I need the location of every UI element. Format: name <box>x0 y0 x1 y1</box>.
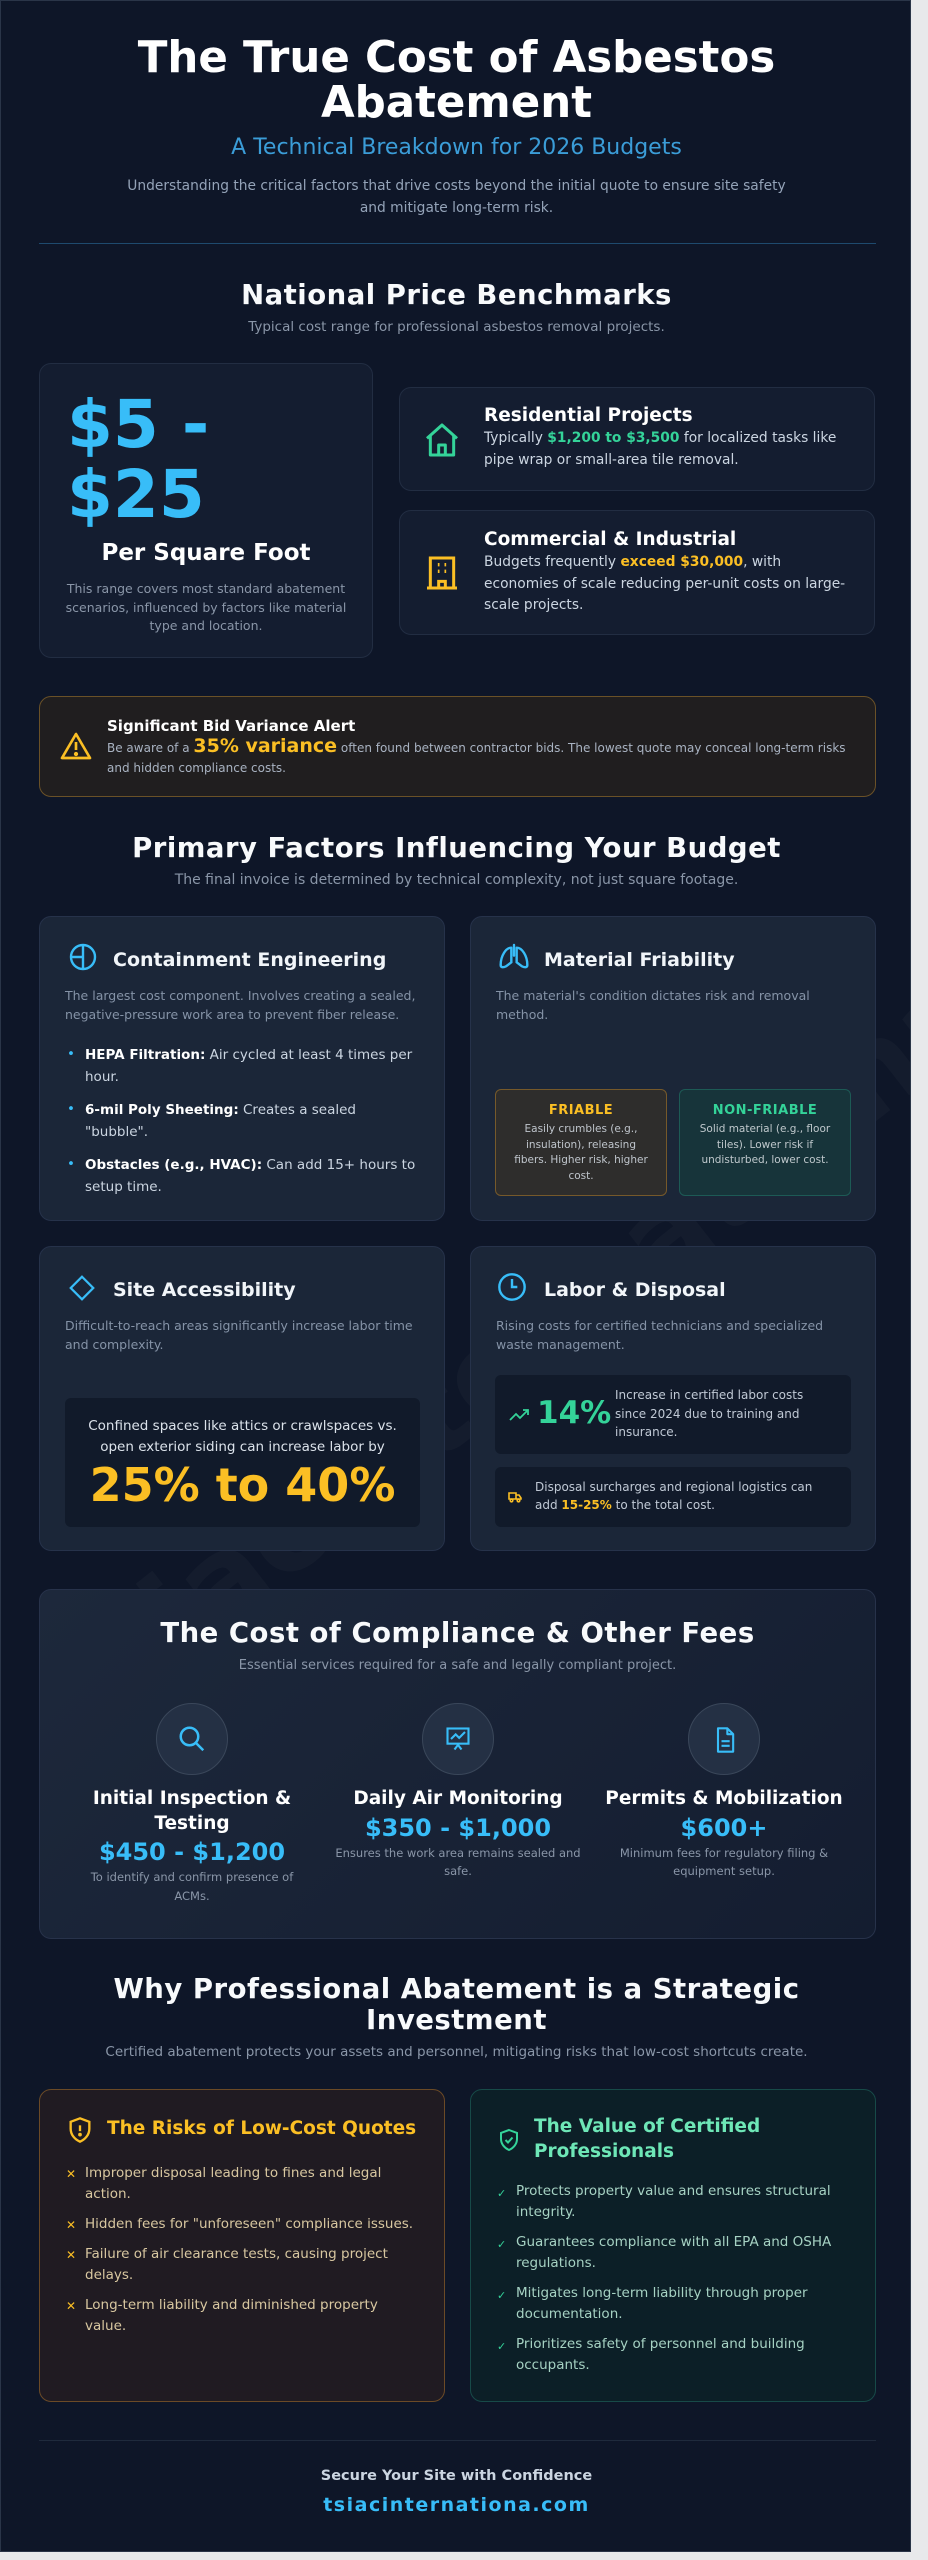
item: inspection: $450 - $1,200 <box>99 1838 285 1866</box>
item: air monitoring: Ensures the work area remains sealed and safe. <box>335 1846 581 1878</box>
title: The True Cost of Asbestos <box>138 33 775 83</box>
icon: diamond <box>69 1275 95 1301</box>
stat box: 14%: 14% <box>537 1395 611 1431</box>
bullet list: HEPA Filtration: Air cycled at least 4 times per hour. <box>85 1047 412 1084</box>
icon: shield check <box>500 2128 518 2152</box>
subheading: Essential services required for a safe and legally compliant project. <box>239 1658 676 1673</box>
icon: shield alert <box>70 2117 90 2143</box>
title: Material Friability <box>544 949 735 971</box>
stat box: disposal: Disposal surcharges and regional logistics can add 15-25% to the total cost. <box>535 1480 812 1512</box>
bullet list: • <box>67 1046 75 1062</box>
body: Typically $1,200 to $3,500 for localized tasks like pipe wrap or small-area tile removal. <box>484 430 836 468</box>
list: Hidden fees for "unforeseen" compliance issues. <box>85 2216 413 2232</box>
alert title: Significant Bid Variance Alert <box>107 717 355 735</box>
title: Labor & Disposal <box>544 1279 726 1301</box>
panel: labor & disposal <box>470 1246 876 1551</box>
icon: trend <box>509 1409 529 1421</box>
stat box: 14% <box>495 1375 851 1454</box>
title: The Value of Certified Professionals <box>534 2116 760 2162</box>
list: ✕ <box>66 2248 76 2262</box>
item: permits: Minimum fees for regulatory filing & equipment setup. <box>620 1846 828 1878</box>
list: ✕ <box>66 2167 76 2181</box>
item: permits <box>605 1703 843 1878</box>
list: ✓ <box>497 2187 506 2200</box>
bullet list: Obstacles (e.g., HVAC): Can add 15+ hours to setup time. <box>85 1157 415 1194</box>
subheading: Typical cost range for professional asbestos removal projects. <box>248 319 665 335</box>
icon: warning <box>60 732 92 760</box>
intro text: Understanding the critical factors that drive costs beyond the initial quote to ensure site safety and mitigate long-term risk. <box>127 178 786 216</box>
highlight box: Confined spaces like attics or crawlspaces vs. open exterior siding can increase labor by <box>88 1418 397 1455</box>
list <box>497 2183 832 2373</box>
icon: house <box>426 423 458 456</box>
body: Budgets frequently exceed $30,000, with economies of scale reducing per-unit costs on large-scale projects. <box>484 554 845 613</box>
item: inspection: Initial Inspection & Testing <box>93 1788 291 1834</box>
title: Residential Projects <box>484 405 693 426</box>
footer tagline: Secure Your Site with Confidence <box>321 2468 592 2484</box>
bullet list: "bubble". <box>85 1124 148 1140</box>
list: Failure of air clearance tests, causing project delays. <box>85 2246 388 2283</box>
icon: containment <box>70 944 96 970</box>
item: air monitoring <box>335 1703 581 1878</box>
description: Rising costs for certified technicians and specialized waste management. <box>496 1318 823 1352</box>
callout: bid variance alert <box>39 696 876 797</box>
subtitle: A Technical Breakdown for 2026 Budgets <box>231 135 682 160</box>
list: Prioritizes safety of personnel and building occupants. <box>516 2336 805 2373</box>
subheading: The final invoice is determined by technical complexity, not just square footage. <box>175 872 738 888</box>
bullet list: • <box>67 1156 75 1172</box>
big price: $25 <box>67 456 205 533</box>
item: permits: Permits & Mobilization <box>605 1788 843 1809</box>
icon: clock <box>498 1273 526 1301</box>
list <box>66 2165 413 2334</box>
title: Site Accessibility <box>113 1279 296 1301</box>
panel: commercial <box>399 510 875 635</box>
icon: truck <box>508 1492 522 1503</box>
list: Guarantees compliance with all EPA and OSHA regulations. <box>516 2234 831 2271</box>
bullet list: 6-mil Poly Sheeting: Creates a sealed <box>85 1102 356 1118</box>
box: friable <box>495 1089 667 1196</box>
title: Abatement <box>321 78 592 128</box>
item: air monitoring: Daily Air Monitoring <box>353 1788 563 1809</box>
icon: building <box>427 556 457 590</box>
icon: document <box>688 1703 760 1775</box>
list: ✕ <box>66 2299 76 2313</box>
heading: national price benchmarks: National Price Benchmarks <box>241 279 672 311</box>
heading: primary factors: Primary Factors Influencing Your Budget <box>132 832 781 864</box>
panel: site accessibility <box>39 1246 445 1551</box>
box: friable: FRIABLE <box>549 1103 613 1118</box>
bullet list: • <box>67 1101 75 1117</box>
item: air monitoring: $350 - $1,000 <box>365 1814 551 1842</box>
item: inspection: To identify and confirm presence of ACMs. <box>91 1870 293 1902</box>
title: The Risks of Low-Cost Quotes <box>107 2118 416 2139</box>
highlight box <box>65 1398 420 1527</box>
list: Protects property value and ensures structural integrity. <box>516 2183 831 2220</box>
panel: per square foot <box>39 363 373 658</box>
box: non-friable: NON-FRIABLE <box>713 1103 817 1118</box>
list: ✓ <box>497 2238 506 2251</box>
list: Improper disposal leading to fines and legal action. <box>85 2165 381 2202</box>
bullet list <box>67 1046 415 1194</box>
description: Difficult-to-reach areas significantly increase labor time and complexity. <box>65 1318 413 1352</box>
panel: containment engineering <box>39 916 445 1221</box>
list: value. <box>85 2318 126 2334</box>
description: The material's condition dictates risk and removal method. <box>496 988 810 1022</box>
panel: residential <box>399 387 875 491</box>
big price: $5 - <box>67 386 209 463</box>
panel: material friability <box>470 916 876 1221</box>
description: The largest cost component. Involves creating a sealed, negative-pressure work area to prevent fiber release. <box>65 988 415 1022</box>
list: Mitigates long-term liability through proper documentation. <box>516 2285 808 2322</box>
heading: The Cost of Compliance & Other Fees <box>160 1617 755 1649</box>
box: non-friable <box>679 1089 851 1196</box>
icon: lungs <box>500 944 528 968</box>
panel: value of certified professionals <box>470 2089 876 2402</box>
panel: cost of compliance <box>39 1589 876 1939</box>
big price <box>67 386 209 533</box>
icon: magnifier <box>156 1703 228 1775</box>
item: inspection <box>90 1703 294 1902</box>
stat box: disposal <box>495 1467 851 1527</box>
list: Long-term liability and diminished property <box>85 2297 378 2313</box>
alert body: Be aware of a 35% variance often found between contractor bids. The lowest quote may conceal long-term risks and hidden compliance costs. <box>107 735 846 775</box>
list: ✕ <box>66 2218 76 2232</box>
panel: risks of low-cost quotes <box>39 2089 445 2402</box>
icon: chart board <box>422 1703 494 1775</box>
box: friable: Easily crumbles (e.g., insulation), releasing fibers. Higher risk, higher cost. <box>514 1123 648 1182</box>
item: permits: $600+ <box>681 1814 767 1842</box>
subheading: Certified abatement protects your assets and personnel, mitigating risks that low-cost shortcuts create. <box>105 2044 808 2060</box>
footer url: tsiacinternationa.com <box>323 2494 590 2516</box>
title: Commercial & Industrial <box>484 529 736 550</box>
list: ✓ <box>497 2340 506 2353</box>
big stat: 25% to 40% <box>90 1458 395 1512</box>
stat box: 14%: Increase in certified labor costs since 2024 due to training and insurance. <box>615 1388 803 1439</box>
list: ✓ <box>497 2289 506 2302</box>
label: Per Square Foot <box>101 540 311 566</box>
box: non-friable: Solid material (e.g., floor tiles). Lower risk if undisturbed, lower cost. <box>700 1123 830 1166</box>
title: Containment Engineering <box>113 949 386 971</box>
description: This range covers most standard abatement scenarios, influenced by factors like material type and location. <box>66 581 346 633</box>
heading: why professional abatement: Why Professional Abatement is a Strategic Investment <box>113 1973 800 2036</box>
title <box>138 33 775 128</box>
